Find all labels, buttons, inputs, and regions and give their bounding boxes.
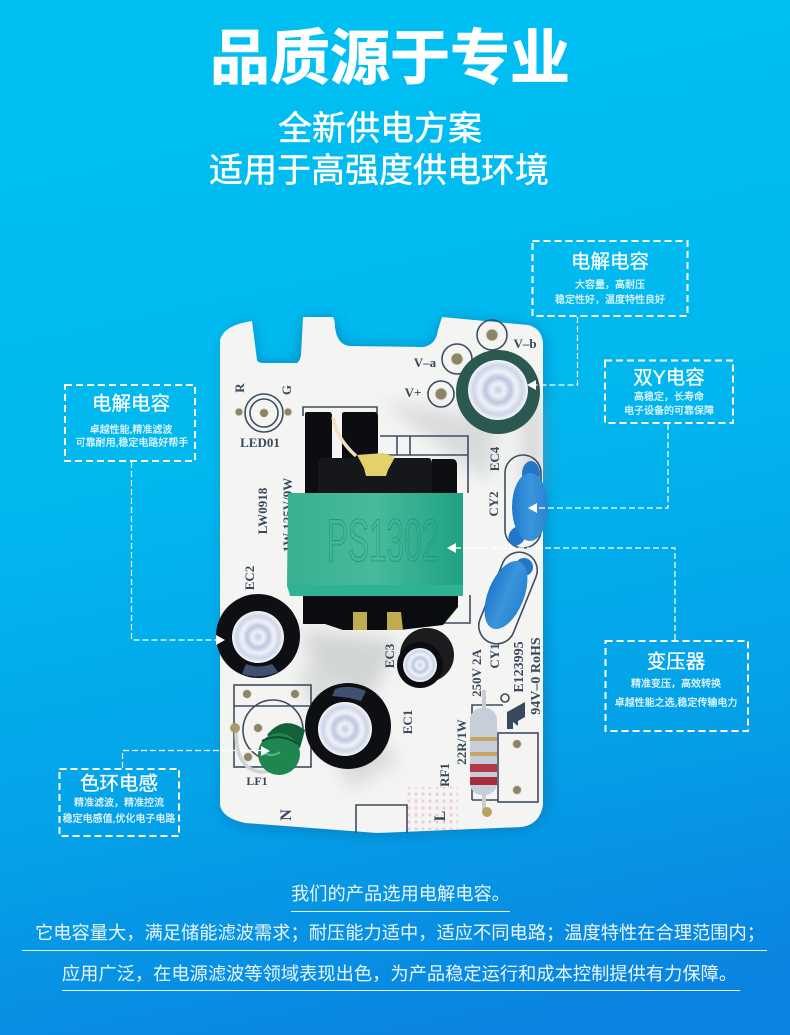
- silkscreen labels: LED01: [240, 435, 280, 450]
- transformer green body: [287, 493, 463, 595]
- title: 品质源于专业: [210, 25, 570, 92]
- silkscreen labels: EC4: [487, 446, 502, 471]
- silkscreen labels: V–a: [414, 355, 437, 370]
- silkscreen labels: 94V–0 RoHS: [529, 637, 544, 715]
- silkscreen labels: CY2: [486, 491, 501, 517]
- transformer: PS1302: [327, 507, 439, 574]
- mounting holes: [235, 329, 522, 794]
- Y capacitor CY1: [476, 555, 536, 635]
- transformer: [287, 412, 463, 630]
- capacitor EC1: [305, 683, 391, 769]
- silkscreen labels: [232, 336, 544, 821]
- pink print marks: [407, 787, 458, 830]
- callout: dual Y capacitor: [605, 360, 733, 423]
- subtitle: [209, 110, 549, 190]
- callout: transformer: 变压器: [647, 651, 705, 673]
- silkscreen labels: 250V 2A: [469, 648, 484, 697]
- silkscreen labels: V+: [405, 385, 421, 400]
- transformer black core: [305, 412, 332, 493]
- callout: electrolytic capacitor top right: 电解电容: [571, 251, 649, 273]
- callout: electrolytic capacitor left: 电解电容: [92, 393, 170, 415]
- silkscreen labels: EC2: [242, 566, 257, 590]
- callout: color ring inductor: 精准滤波，精准控流: [74, 796, 164, 809]
- capacitor EC3: [397, 628, 454, 688]
- capacitor EC2: [216, 594, 300, 678]
- soft shadows on board: [300, 400, 542, 790]
- callout: color ring inductor: 稳定电感值,优化电子电路: [63, 812, 175, 825]
- silkscreen labels: V–b: [513, 336, 537, 351]
- circuit board: [216, 317, 548, 835]
- callout: transformer: 卓越性能之选,稳定传输电力: [615, 696, 737, 709]
- silkscreen labels: RF1: [437, 763, 452, 787]
- callout: dual Y capacitor: 电子设备的可靠保障: [624, 404, 714, 417]
- capacitor EC4: [456, 350, 540, 434]
- silkscreen labels: G: [279, 385, 294, 395]
- callout: color ring inductor: 色环电感: [80, 773, 158, 795]
- arrow: dual Y capacitor: [528, 424, 668, 513]
- callout: electrolytic capacitor left: [65, 385, 195, 461]
- silkscreen labels: E123995: [512, 641, 527, 693]
- inductor: [230, 723, 305, 775]
- silkscreen labels: R: [232, 383, 247, 393]
- silkscreen outlines: [234, 320, 543, 833]
- subtitle: 全新供电方案: [278, 110, 482, 148]
- callout: electrolytic capacitor left: 卓越性能,精准滤波: [90, 423, 172, 436]
- callout: color ring inductor: [60, 769, 179, 836]
- silkscreen labels: 1W 125V/9W: [280, 478, 295, 552]
- description text: [22, 883, 767, 991]
- description text: 应用广泛，在电源滤波等领域表现出色，为产品稳定运行和成本控制提供有力保障。: [62, 963, 737, 984]
- callout: transformer: [606, 641, 748, 731]
- description text: 我们的产品选用电解电容。: [291, 883, 510, 904]
- resistor: [470, 690, 497, 817]
- silkscreen labels: LF1: [246, 774, 268, 788]
- callout: electrolytic capacitor top right: 大容量，高耐压: [575, 278, 645, 291]
- description text: 它电容量大，满足储能滤波需求；耐压能力适中，适应不同电路；温度特性在合理范围内；: [35, 922, 765, 943]
- callout: electrolytic capacitor top right: [532, 241, 688, 316]
- callout: dual Y capacitor: 高稳定，长寿命: [634, 390, 704, 403]
- silkscreen labels: LW0918: [255, 487, 270, 534]
- silkscreen labels: CY1: [487, 643, 502, 669]
- silkscreen labels: L: [432, 811, 449, 821]
- silkscreen labels: 22R/1W: [454, 719, 469, 765]
- arrow: electrolytic capacitor left: [132, 462, 225, 645]
- silkscreen labels: N: [278, 809, 295, 821]
- callout: transformer: 精准变压，高效转换: [631, 677, 721, 690]
- board outline: [220, 317, 543, 833]
- callout: dual Y capacitor: 双Y电容: [633, 367, 705, 389]
- arrow: color ring inductor: [122, 746, 270, 768]
- silkscreen labels: EC1: [400, 710, 415, 734]
- callout: electrolytic capacitor left: 可靠耐用,稳定电路好帮手: [76, 436, 188, 449]
- arrow: electrolytic capacitor top right: [527, 317, 578, 390]
- Y capacitor CY2: [505, 461, 548, 549]
- callout: electrolytic capacitor top right: 稳定性好，温度特性良好: [555, 293, 665, 306]
- arrow: transformer: [447, 543, 675, 640]
- subtitle: 适用于高强度供电环境: [209, 152, 549, 190]
- silkscreen labels: EC3: [382, 643, 397, 668]
